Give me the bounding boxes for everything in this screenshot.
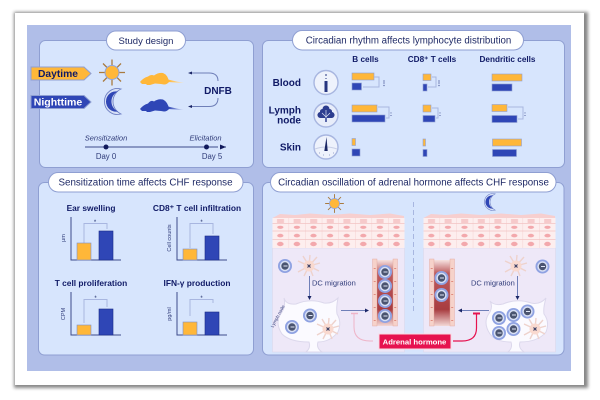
timeline bbox=[85, 134, 226, 161]
label: DNFB: DNFB bbox=[204, 86, 232, 97]
column headers: Dendritic cells bbox=[480, 55, 536, 64]
DC migration bbox=[516, 276, 518, 296]
timeline: Elicitation bbox=[189, 134, 222, 142]
strong inhibition bbox=[453, 314, 476, 341]
DC migration bbox=[308, 276, 310, 296]
icon: moon bbox=[484, 194, 495, 210]
chart: IFN-γ production: * bbox=[200, 296, 203, 302]
arrow to vessel bbox=[462, 310, 489, 312]
label: lymph node: Lymph node bbox=[270, 304, 286, 328]
heading: adrenal hormone bbox=[270, 172, 556, 192]
chart: ear swelling: μm bbox=[61, 234, 67, 242]
significance marks: : bbox=[439, 112, 441, 118]
arrow: DNFB to nighttime bbox=[190, 98, 218, 106]
panel: CHF response bbox=[38, 172, 254, 355]
label: adrenal hormone: Adrenal hormone bbox=[383, 338, 447, 346]
chart: CD8 infiltration: * bbox=[200, 220, 203, 226]
blue background bbox=[27, 25, 571, 371]
timeline: Sensitization bbox=[85, 134, 127, 142]
tissue: daytime bbox=[270, 214, 404, 352]
timeline: Day 5 bbox=[202, 152, 223, 161]
chart: ear swelling bbox=[61, 217, 121, 260]
chart titles: T cell proliferation bbox=[55, 278, 127, 288]
significance marks: ⋮ bbox=[436, 80, 442, 87]
chart titles: Ear swelling bbox=[67, 203, 115, 213]
row labels bbox=[269, 78, 301, 154]
timeline: Day 0 bbox=[96, 152, 117, 161]
icon: blue mouse bbox=[140, 99, 184, 112]
chart: IFN-γ production bbox=[167, 292, 227, 335]
tissue: nighttime bbox=[424, 214, 556, 352]
heading: study design: Study design bbox=[119, 36, 173, 47]
significance marks: : bbox=[524, 112, 526, 118]
chart: CD8 T cells bars bbox=[423, 74, 435, 156]
tissue: nighttime: DC migration bbox=[471, 278, 515, 288]
significance marks: ⋮ bbox=[381, 80, 387, 87]
chart: IFN-γ production: pg/ml bbox=[167, 307, 173, 321]
panel: lymphocyte distribution bbox=[262, 30, 564, 168]
chart: B cells bars bbox=[352, 73, 385, 156]
chart: T cell proliferation bbox=[61, 292, 121, 335]
chart: ear swelling: * bbox=[94, 220, 97, 226]
icon: sun bbox=[325, 194, 344, 213]
blood vessel bbox=[432, 260, 452, 326]
significance marks bbox=[381, 80, 526, 118]
cells bbox=[278, 259, 292, 273]
row labels: node bbox=[277, 116, 301, 126]
icon: orange mouse bbox=[140, 73, 184, 85]
tissue: daytime: DC migration bbox=[312, 278, 356, 288]
row labels: Blood bbox=[273, 78, 301, 89]
column headers: CD8⁺ T cells bbox=[408, 55, 457, 64]
column headers bbox=[352, 55, 536, 64]
heading: lymphocyte distribution bbox=[292, 30, 524, 50]
blood vessel bbox=[375, 260, 395, 326]
chart titles: CD8⁺ T cell infiltration bbox=[153, 203, 241, 213]
heading: adrenal hormone: Circadian oscillation of adrenal hormone affects CHF response bbox=[278, 178, 549, 188]
significance marks: : bbox=[390, 112, 392, 118]
significance brackets bbox=[363, 77, 523, 119]
panel: study design bbox=[31, 31, 254, 168]
heading: study design bbox=[106, 31, 186, 50]
icon: skin bbox=[314, 135, 338, 159]
divider bbox=[412, 202, 414, 312]
lymph node bbox=[486, 298, 548, 352]
chart: dendritic cells bars bbox=[492, 74, 522, 156]
icon: blood tube bbox=[314, 70, 338, 94]
label: adrenal hormone bbox=[379, 334, 451, 349]
chart: CD8 infiltration: Cell counts bbox=[167, 224, 173, 252]
label: nighttime: Nighttime bbox=[34, 96, 82, 108]
chart: CD8 infiltration bbox=[167, 217, 227, 260]
label: daytime: Daytime bbox=[38, 69, 78, 80]
arrow: DNFB to daytime bbox=[190, 73, 218, 81]
weak inhibition bbox=[354, 314, 373, 341]
row labels: Skin bbox=[280, 142, 301, 154]
cells bbox=[505, 255, 527, 276]
chart: T cell proliferation: CPM bbox=[61, 307, 67, 320]
arrowheads bbox=[188, 72, 192, 108]
panel: adrenal hormone bbox=[262, 172, 564, 355]
column headers: B cells bbox=[352, 55, 379, 64]
arrow to vessel bbox=[341, 310, 366, 312]
icon: moon bbox=[104, 88, 121, 114]
icon: lymph node bbox=[314, 103, 338, 127]
icon: sun bbox=[99, 60, 125, 86]
label: daytime bbox=[31, 67, 91, 80]
chart titles: IFN-γ production bbox=[164, 278, 230, 288]
row labels: Lymph bbox=[269, 106, 301, 116]
chart titles bbox=[55, 203, 241, 288]
heading: CHF response: Sensitization time affects CHF response bbox=[58, 178, 233, 188]
heading: CHF response bbox=[48, 172, 243, 192]
chart: T cell proliferation: * bbox=[94, 296, 97, 302]
heading: lymphocyte distribution: Circadian rhythm affects lymphocyte distribution bbox=[306, 36, 511, 46]
lymph node bbox=[278, 298, 340, 352]
